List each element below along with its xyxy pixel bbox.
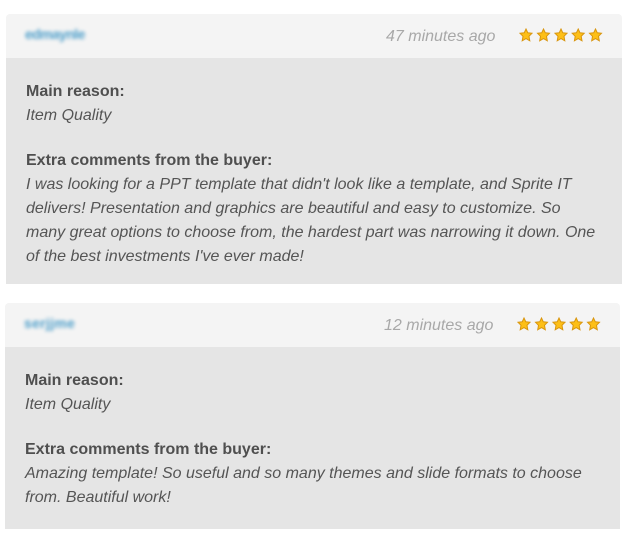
review 2 comment text: Amazing template! So useful and so many themes and slide formats to choose [25, 465, 582, 482]
panel: review 1 [6, 14, 622, 284]
review 2 timestamp: 12 minutes ago [384, 317, 493, 334]
review 2 comment text: from. Beautiful work! [25, 489, 171, 506]
review 1 comment text: delivers! Presentation and graphics are beautiful and easy to customize. So [26, 200, 561, 217]
review 2 main reason heading: Main reason: [25, 372, 124, 389]
review 1 timestamp: 47 minutes ago [386, 28, 495, 45]
review 1 main reason heading: Main reason: [26, 83, 125, 100]
review 1 comment text: of the best investments I've ever made! [26, 248, 304, 265]
review 2 header bar [5, 303, 620, 347]
review 2 comment text [24, 465, 582, 506]
review 1 comment text: many great options to choose from, the hardest part was narrowing it down. One [26, 224, 595, 241]
review 1 extra comments heading: Extra comments from the buyer: [26, 152, 272, 169]
icon: review 2 five star rating [517, 317, 600, 331]
review 1 header bar [6, 14, 622, 58]
review 2 extra comments heading: Extra comments from the buyer: [25, 441, 271, 458]
review 1 comment text: I was looking for a PPT template that didn't look like a template, and Sprite IT [26, 176, 572, 193]
icon: review 1 five star rating [519, 28, 602, 42]
review 2 body background [5, 347, 620, 529]
review 2 blurred username: serjjme [24, 315, 75, 331]
review 1 body background [6, 58, 622, 284]
panel: review 2 [5, 303, 620, 529]
review 1 blurred username: edmaynle [25, 26, 85, 42]
review 2 main reason value: Item Quality [25, 396, 110, 413]
review 1 comment text [26, 176, 595, 265]
review 1 main reason value: Item Quality [26, 107, 111, 124]
